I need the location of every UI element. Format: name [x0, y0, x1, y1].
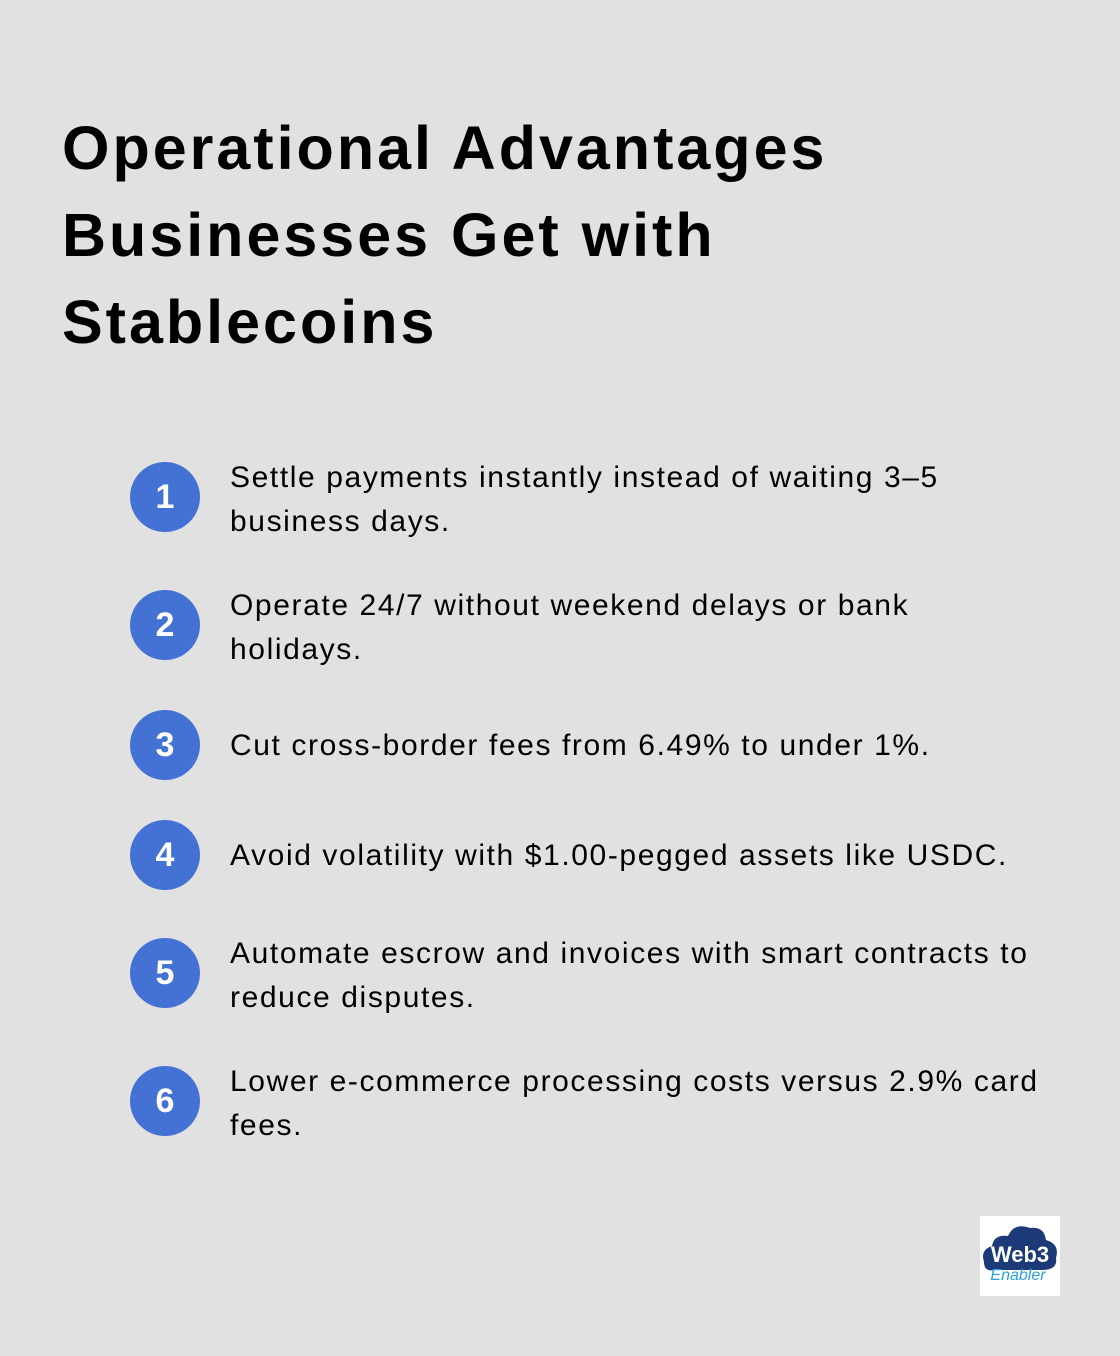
item 3: 3 [156, 726, 174, 764]
item 6: Lower e-commerce processing costs versus 2.9% card [230, 1065, 1039, 1098]
item 5: reduce disputes. [230, 981, 476, 1014]
item 4 [130, 820, 1008, 890]
item 4: Avoid volatility with $1.00-pegged assets like USDC. [230, 839, 1008, 872]
title: Businesses Get with [62, 201, 716, 269]
title [62, 114, 827, 356]
logo: Web3 Enabler [980, 1216, 1060, 1296]
logo: Web3 Enabler: Enabler [990, 1267, 1046, 1284]
item 2: Operate 24/7 without weekend delays or bank [230, 589, 909, 622]
item 6: 6 [156, 1082, 174, 1120]
item 3 [130, 710, 931, 780]
item 5 [130, 937, 1028, 1014]
logo: Web3 Enabler: Web3 [991, 1242, 1049, 1267]
item 3: Cut cross-border fees from 6.49% to under 1%. [230, 729, 931, 762]
item 5: Automate escrow and invoices with smart contracts to [230, 937, 1028, 970]
item 4: 4 [156, 836, 174, 874]
item 1: 1 [156, 478, 174, 516]
item 2: holidays. [230, 633, 363, 666]
item 2: 2 [156, 606, 174, 644]
item 6: fees. [230, 1109, 303, 1142]
item 5: 5 [156, 954, 174, 992]
title: Stablecoins [62, 288, 437, 356]
title: Operational Advantages [62, 114, 827, 182]
item 6 [130, 1065, 1039, 1142]
item 1 [130, 461, 939, 538]
item 1: business days. [230, 505, 451, 538]
item 1: Settle payments instantly instead of waiting 3–5 [230, 461, 939, 494]
item 2 [130, 589, 909, 666]
